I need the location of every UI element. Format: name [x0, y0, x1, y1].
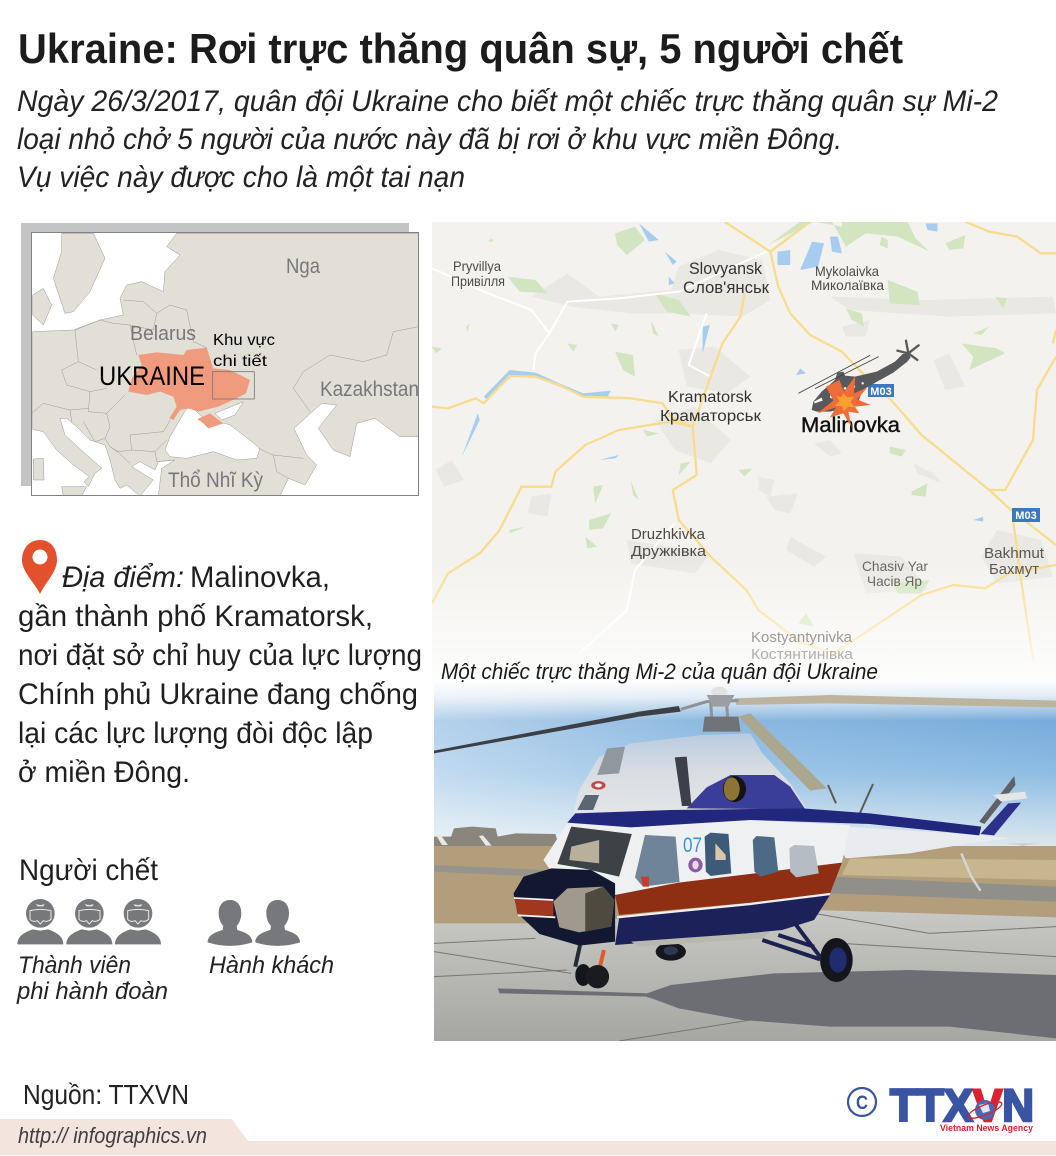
city labels: Slovyansk	[689, 259, 762, 278]
road shield: M03 lower: M03	[1015, 510, 1037, 522]
city labels: Kramatorsk	[668, 389, 753, 406]
city labels: Дружківка	[631, 543, 707, 560]
panel: detail road map	[432, 222, 1056, 692]
map label: detail area: Khu vực	[213, 332, 275, 349]
photo: rear wheel	[656, 943, 686, 961]
footer url: http:// infographics.vn	[18, 1123, 207, 1148]
photo: number 07: 07	[683, 834, 702, 857]
panel: locator map of Ukraine	[21, 223, 419, 496]
map label: Nga: Nga	[286, 255, 320, 278]
photo: nose landing gear	[575, 945, 609, 988]
text block: location description: Địa điểm:	[62, 561, 184, 594]
text block: location description: Malinovka,	[190, 561, 330, 594]
title: Ukraine: Rơi trực thăng quân sự, 5 người chết	[18, 25, 903, 72]
icons: two passengers	[208, 900, 300, 946]
text block: location description: nơi đặt sở chỉ huy của lực lượng	[18, 639, 422, 672]
photo: cabin windows	[635, 833, 819, 887]
photo: red lower fuselage	[615, 863, 842, 915]
photo: treeline and horizon	[434, 826, 1038, 846]
road shield: M03 lower	[1012, 508, 1040, 522]
city labels: Bakhmut	[984, 545, 1045, 562]
photo: main landing gear	[762, 924, 853, 982]
city labels: Kostyantynivka	[751, 629, 853, 646]
text block: location description: Chính phủ Ukraine đang chống	[18, 678, 418, 711]
logo: copyright mark	[848, 1088, 876, 1116]
logo: copyright mark: C	[856, 1093, 868, 1114]
photo: helicopter shadow	[498, 970, 1056, 1038]
city labels: Druzhkivka	[631, 526, 706, 543]
city labels: Привілля	[451, 274, 505, 289]
map label: Turkey: Thổ Nhĩ Kỳ	[168, 469, 263, 492]
icon: crew member 2	[66, 899, 112, 944]
map label: detail area: chi tiết	[213, 353, 268, 370]
city labels: Mykolaivka	[815, 263, 879, 279]
caption: photo: Một chiếc trực thăng Mi-2 của quân đội Ukraine	[441, 659, 878, 684]
city labels: Бахмут	[989, 561, 1039, 578]
heading: deaths: Người chết	[19, 854, 159, 887]
city labels: Часів Яр	[867, 573, 922, 589]
text block: location description	[18, 561, 422, 789]
photo: tail boom and rotor	[828, 776, 1027, 891]
subtitle text block: loại nhỏ chở 5 người của nước này đã bị rơi ở khu vực miền Đông.	[17, 123, 842, 156]
label: crew	[16, 952, 168, 1005]
icon: crashed helicopter with explosion	[798, 341, 919, 427]
label: Malinovka: Malinovka	[801, 414, 900, 437]
text block: location description: ở miền Đông.	[18, 756, 190, 789]
photo: navy fuselage stripe	[567, 808, 981, 835]
road shield: M03 upper: M03	[870, 386, 892, 398]
photo: white mid fuselage	[543, 820, 850, 895]
city labels: Слов'янськ	[683, 278, 770, 297]
photo: navy belly	[615, 894, 830, 947]
photo: upper cabin dome	[571, 733, 806, 820]
label: passengers: Hành khách	[209, 952, 334, 979]
icon: crew member 1	[17, 899, 63, 944]
photo: rotor head and blades	[434, 687, 1056, 791]
map label: UKRAINE: UKRAINE	[99, 361, 205, 391]
icons: three crew members	[17, 899, 161, 944]
city labels	[451, 259, 1045, 663]
photo: windshield	[557, 826, 632, 877]
footer band	[0, 1119, 1056, 1155]
city labels: Pryvillya	[453, 259, 501, 274]
icon: location pin	[22, 540, 57, 594]
photo: fuselage emblem	[688, 858, 703, 872]
label: crew: Thành viên	[18, 952, 131, 979]
subtitle text block: Vụ việc này được cho là một tai nạn	[17, 161, 465, 194]
subtitle text block	[17, 85, 998, 194]
icon: passenger 1	[208, 900, 252, 946]
photo: airfield grass	[434, 846, 1056, 924]
map label: Belarus: Belarus	[130, 323, 196, 345]
logo: TTXVN: TTXVN	[890, 1080, 1034, 1131]
photo: concrete apron	[434, 910, 1056, 1041]
photo: Mi-2 helicopter on apron	[434, 680, 1056, 1041]
map label: Kazakhstan: Kazakhstan	[320, 378, 419, 401]
map label: detail area	[213, 332, 275, 370]
subtitle text block: Ngày 26/3/2017, quân đội Ukraine cho biết một chiếc trực thăng quân sự Mi-2	[17, 85, 998, 118]
city labels: Костянтинівка	[751, 646, 854, 663]
city labels: Chasiv Yar	[862, 558, 928, 574]
city labels: Краматорськ	[660, 408, 762, 425]
icon: crew member 3	[115, 899, 161, 944]
photo: engine blue panel	[577, 747, 805, 810]
label: crew: phi hành đoàn	[16, 978, 168, 1005]
logo: TTXVN: Vietnam News Agency	[940, 1123, 1034, 1134]
icon: passenger 2	[255, 900, 300, 946]
text block: location description: gần thành phố Kramatorsk,	[18, 600, 373, 633]
photo: nose	[514, 868, 615, 946]
text block: location description: lại các lực lượng đòi độc lập	[18, 717, 373, 750]
city labels: Миколаївка	[811, 277, 884, 293]
source: Nguồn: TTXVN	[23, 1079, 189, 1110]
